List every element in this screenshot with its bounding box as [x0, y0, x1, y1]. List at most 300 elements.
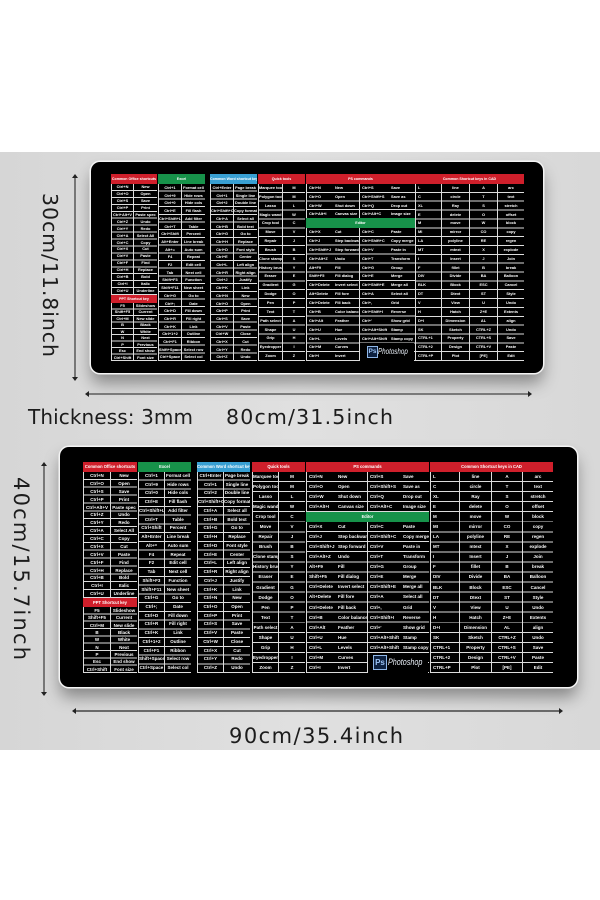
- column: office keys: Ctrl+S: [117, 198, 128, 203]
- column: CAD names 2: Undo: [506, 326, 516, 332]
- column: Excel keys: Ctrl+R: [164, 316, 176, 321]
- column: CAD keys 1: M: [433, 514, 437, 519]
- column: CAD keys 2: O: [505, 504, 509, 509]
- column: CAD names 1: [441, 184, 469, 361]
- column: PPT keys: N: [95, 645, 99, 650]
- column: PPT actions: [133, 303, 157, 361]
- logo: Photoshop large: [368, 653, 428, 673]
- column: Excel actions: Function: [185, 277, 202, 282]
- column: Excel keys: Ctrl+Shift+L: [159, 216, 181, 221]
- column: Word keys: Ctrl+V: [216, 324, 228, 329]
- column: CAD keys 2: A: [505, 474, 509, 479]
- column: CAD keys 1: C: [418, 194, 421, 199]
- label: large mat width: 90cm/35.4inch: [229, 724, 403, 748]
- column: Word actions: Left align: [227, 560, 247, 565]
- column: CAD keys 2: AL: [481, 318, 486, 323]
- column: office actions: Print: [141, 205, 150, 210]
- column: Word actions: Print: [241, 308, 250, 313]
- column: Excel keys: Tab: [167, 270, 173, 275]
- column: tool names: Eyedropper: [253, 655, 278, 660]
- column: CAD keys 1: H: [418, 309, 421, 314]
- column: CAD names 2: Extents: [530, 615, 546, 620]
- column: CAD names 1: Sketch: [468, 635, 483, 640]
- column: CAD keys 1: I: [433, 554, 434, 559]
- column: CAD keys 2: CO: [504, 524, 510, 529]
- column: Word keys: Ctrl+G: [204, 525, 217, 530]
- column: CAD keys 1: [415, 184, 441, 361]
- column: office actions: Underline: [114, 591, 134, 596]
- column: CAD names 2: Balloon: [504, 273, 518, 278]
- column: Word actions: Select all: [237, 216, 254, 221]
- column: CAD names 2: Undo: [532, 635, 544, 640]
- column: editor actions left: Levels: [335, 336, 347, 340]
- column: CAD keys 2: T: [482, 194, 485, 199]
- column: Word keys: Ctrl+S: [216, 316, 228, 321]
- column: Excel keys: Shift+Space: [159, 347, 181, 352]
- column: editor actions left: Fill fore: [338, 594, 354, 599]
- heading: Excel: Excel: [177, 177, 186, 181]
- column: CAD keys 1: XL: [433, 494, 439, 499]
- column: PPT actions: White: [140, 329, 151, 334]
- icon: Ps badge: Ps: [375, 658, 385, 667]
- column: Word actions: Go to: [231, 525, 243, 530]
- column: office actions: Italic: [119, 583, 129, 588]
- column: tool keys: S: [293, 256, 295, 261]
- heading: PPT shortcuts: PPT Shortcut key: [119, 297, 149, 301]
- column: editor actions right: Transform: [391, 256, 410, 261]
- column: Excel keys: F2: [149, 560, 154, 565]
- column: CAD names 2: arc: [535, 474, 541, 479]
- column: CAD names 1: Sketch: [449, 326, 462, 332]
- column: Excel actions: Format cell: [183, 185, 204, 190]
- column: PS actions left: New: [335, 185, 343, 190]
- column: tool names: Pen: [267, 300, 274, 305]
- heading: PPT shortcuts: [83, 598, 137, 607]
- column: editor keys right: Ctrl+Alt+Shift: [370, 635, 399, 640]
- column: Excel actions: Ribbon: [187, 339, 200, 344]
- column: office actions: Redo: [141, 226, 150, 231]
- column: office actions: Replace: [138, 267, 153, 272]
- column: PPT actions: Slideshow: [113, 608, 135, 613]
- column: tool names: Lasso: [265, 203, 276, 208]
- column: editor keys right: Ctrl+Shift+I: [362, 309, 383, 314]
- column: tool keys: E: [293, 273, 295, 278]
- column: Excel actions: Fill flash: [169, 499, 187, 504]
- heading: PS commands: [306, 462, 429, 472]
- column: CAD names 2: Cancel: [531, 585, 545, 590]
- column: Word actions: Print: [232, 613, 242, 618]
- column: Excel keys: [138, 472, 164, 673]
- column: CAD names 1: Dtext: [451, 291, 460, 296]
- column: PPT keys: P: [121, 342, 124, 347]
- column: Word keys: Ctrl+S: [204, 621, 217, 626]
- column: editor keys left: Ctrl+J: [309, 238, 320, 243]
- column: office keys: Ctrl+O: [90, 481, 104, 486]
- column: CAD keys 1: SK: [418, 326, 423, 332]
- column: Excel keys: Tab: [148, 569, 155, 574]
- column: CAD names 1: line: [472, 474, 479, 479]
- column: CAD names 1: View: [470, 605, 481, 610]
- column: PS actions right: Image size: [403, 504, 426, 509]
- label: small mat height: 30cm/11.8inch: [38, 193, 62, 357]
- column: editor keys right: Ctrl+,: [362, 300, 372, 305]
- heading: editor: [306, 218, 415, 228]
- column: Word keys: Ctrl+D: [204, 543, 217, 548]
- column: CAD keys 1: D+I: [418, 318, 424, 323]
- column: office keys: Ctrl+Alt+V: [86, 504, 108, 510]
- column: CAD keys 2: CTRL+Z: [476, 326, 491, 332]
- column: tool keys: J: [293, 238, 295, 243]
- column: tool names: Eraser: [258, 574, 272, 579]
- column: CAD names 2: regen: [506, 238, 516, 243]
- column: editor actions right: Merge all: [391, 282, 408, 287]
- column: Excel keys: Ctrl+0: [164, 200, 176, 205]
- label: thickness: Thickness: 3mm: [27, 405, 193, 429]
- column: Word actions: Undo: [241, 354, 250, 359]
- column: editor actions left: Feather: [335, 318, 349, 323]
- column: CAD keys 1: DT: [433, 595, 439, 600]
- column: editor keys left: Ctrl+L: [309, 336, 320, 340]
- column: Word keys: Ctrl+K: [216, 285, 228, 290]
- column: editor keys right: Ctrl+': [362, 318, 372, 323]
- column: Word actions: Cut: [242, 339, 249, 344]
- column: editor keys left: Ctrl+Delete: [309, 584, 333, 589]
- column: tool keys: Y: [293, 265, 295, 270]
- column: CAD keys 1: MT: [433, 544, 440, 549]
- column: office actions: Paste spec: [112, 504, 136, 510]
- column: CAD names 1: circle: [450, 194, 461, 199]
- column: PPT actions: [110, 607, 137, 673]
- column: CAD keys 2: BA: [481, 273, 486, 278]
- column: office actions: Undo: [141, 219, 150, 224]
- column: CAD names 1: Divide: [450, 273, 461, 278]
- column: Word actions: Center: [239, 254, 252, 259]
- column: office actions: Underline: [137, 288, 154, 293]
- column: editor actions left: Fill fore: [335, 291, 349, 296]
- column: editor keys left: Ctrl+X: [309, 229, 321, 234]
- column: office actions: New: [142, 184, 150, 189]
- column: PPT actions: Black: [118, 630, 130, 635]
- column: CAD names 1: Divide: [469, 574, 482, 579]
- column: Excel keys: Ctrl+0: [145, 490, 158, 495]
- column: tool keys: O: [290, 595, 294, 600]
- column: editor actions left: Fill back: [335, 300, 351, 305]
- column: Excel actions: Date: [189, 301, 198, 306]
- column: CAD names 2: regen: [532, 534, 544, 539]
- column: PS keys left: Ctrl+Alt+I: [309, 504, 329, 509]
- column: office keys: Ctrl+H: [90, 568, 104, 572]
- column: Excel actions: Line break: [167, 534, 189, 539]
- column: CAD keys 2: CTRL+V: [476, 344, 491, 349]
- column: PPT actions: Font size: [137, 354, 154, 360]
- panel: small mouse mat 80x30: [91, 162, 543, 373]
- column: tool names: Magic wand: [259, 212, 282, 217]
- column: Excel actions: Edit cell: [186, 262, 201, 267]
- column: tool names: Polygon tool: [259, 194, 282, 199]
- column: PPT keys: Ctrl+M: [116, 316, 129, 321]
- column: PPT keys: B: [95, 630, 99, 635]
- column: PPT keys: Esc: [119, 348, 126, 353]
- column: PS actions left: Canvas size: [335, 211, 357, 216]
- column: CAD keys 2: B: [482, 265, 485, 270]
- column: CAD keys 2: X: [505, 544, 508, 549]
- column: PPT actions: New slide: [114, 623, 134, 628]
- column: editor actions right: Stamp: [391, 327, 403, 332]
- heading: PPT shortcuts: PPT Shortcut key: [93, 600, 127, 605]
- column: CAD names 2: break: [532, 564, 544, 569]
- column: Word actions: Font style: [236, 247, 255, 252]
- column: Word keys: [210, 184, 233, 361]
- column: CAD names 1: Hatch: [450, 309, 461, 314]
- column: Word actions: Link: [242, 285, 250, 290]
- heading: CAD shortcuts: Common Shortcut keys in CAD: [461, 464, 522, 469]
- heading: editor: [306, 512, 429, 522]
- column: Word keys: Ctrl+X: [204, 648, 217, 653]
- column: CAD keys 1: M: [418, 220, 421, 225]
- column: office actions: Cut: [120, 544, 128, 549]
- column: CAD names 1: Design: [468, 655, 483, 660]
- column: Word actions: Page break: [235, 185, 256, 190]
- column: office actions: Paste: [118, 552, 130, 557]
- column: CAD keys 2: [PE]: [480, 353, 487, 358]
- column: editor keys left: Ctrl+Shift+J: [309, 544, 335, 549]
- column: Word keys: Ctrl+Y: [204, 656, 217, 661]
- column: editor keys right: Ctrl+G: [362, 264, 374, 270]
- column: tool keys: M: [290, 474, 294, 479]
- heading: Excel: [158, 174, 205, 184]
- column: Excel keys: Ctrl+Shift+L: [139, 508, 164, 513]
- column: tool keys: W: [290, 504, 294, 509]
- column: tool names: Gradient: [262, 282, 278, 287]
- column: editor actions right: Merge: [391, 273, 402, 278]
- column: CAD names 1: fillet: [471, 564, 480, 569]
- column: editor keys left: Alt+F9: [309, 564, 323, 569]
- column: editor actions right: [389, 228, 415, 361]
- column: CAD keys 2: W: [482, 220, 485, 225]
- column: CAD keys 1: DIV: [433, 574, 441, 579]
- heading: CAD shortcuts: [430, 462, 553, 472]
- heading: PPT shortcuts: [111, 295, 157, 303]
- column: PPT keys: Ctrl+Shift: [87, 667, 107, 672]
- column: editor actions left: Undo: [335, 256, 345, 261]
- column: CAD keys 2: CO: [481, 229, 486, 234]
- column: editor actions right: Stamp: [403, 635, 417, 640]
- column: PS keys right: Ctrl+S: [362, 185, 374, 190]
- column: Excel keys: Ctrl+T: [164, 224, 176, 229]
- column: Excel keys: F4: [149, 552, 154, 557]
- column: tool names: [258, 184, 282, 361]
- column: Word actions: New: [242, 293, 250, 298]
- column: Word actions: Undo: [231, 665, 243, 670]
- column: editor keys left: Shift+F5: [309, 273, 324, 278]
- table: small mat shortcut sheet: [111, 174, 524, 361]
- column: CAD names 1: circle: [470, 484, 481, 489]
- column: tool keys: J: [291, 534, 293, 539]
- column: CAD keys 1: BLK: [418, 282, 426, 287]
- column: office keys: Ctrl+C: [90, 536, 104, 541]
- column: Word keys: Ctrl+Z: [216, 354, 228, 359]
- column: editor actions left: Invert select: [338, 584, 364, 589]
- column: office actions: Paste: [140, 253, 151, 258]
- column: editor keys left: Ctrl+Delete: [309, 604, 333, 610]
- column: Word actions: Bold text: [237, 224, 254, 229]
- column: tool names: Dodge: [258, 595, 272, 600]
- column: tool names: Path select: [254, 625, 277, 630]
- column: Excel actions: Hide rows: [184, 193, 203, 198]
- column: PPT keys: Shift+F5: [115, 309, 130, 314]
- column: Word actions: Justify: [230, 578, 244, 583]
- column: Excel keys: Alt+Enter: [141, 534, 162, 539]
- column: Excel keys: Ctrl+9: [145, 482, 158, 487]
- column: Excel keys: Ctrl+1: [164, 185, 176, 190]
- column: editor actions left: Invert select: [335, 282, 358, 287]
- column: Word keys: Ctrl+P: [216, 308, 228, 313]
- column: editor keys left: [306, 522, 336, 673]
- column: Excel actions: Line break: [184, 239, 203, 244]
- column: Word keys: Ctrl+Z: [204, 665, 217, 670]
- column: PS actions right: Save as: [403, 484, 420, 489]
- heading: CAD shortcuts: Common Shortcut keys in CAD: [443, 177, 496, 181]
- column: office keys: Ctrl+C: [117, 240, 128, 244]
- column: office actions: Italic: [141, 281, 150, 286]
- column: CAD keys 2: S: [505, 494, 508, 499]
- icon: Ps badge: [367, 346, 378, 358]
- column: tool names: Text: [261, 615, 270, 620]
- column: PS keys left: Ctrl+N: [309, 185, 321, 190]
- column: editor keys right: Ctrl+': [370, 625, 381, 630]
- column: editor keys left: Ctrl+M: [309, 344, 321, 349]
- column: Word keys: Ctrl+B: [204, 517, 217, 522]
- column: Word keys: Ctrl+W: [216, 331, 228, 336]
- column: Word keys: Ctrl+Enter: [213, 185, 231, 190]
- heading: CAD shortcuts: [415, 174, 524, 184]
- heading: quick tools: Quick tools: [272, 177, 291, 181]
- column: editor keys right: Ctrl+C: [362, 229, 374, 234]
- column: PS keys left: [306, 472, 336, 512]
- column: editor keys left: Ctrl+B: [309, 309, 321, 314]
- column: tool keys: P: [293, 300, 295, 305]
- column: Excel actions: Table: [172, 517, 184, 522]
- column: CAD keys 2: BA: [504, 574, 510, 579]
- column: office actions: Open: [141, 191, 150, 196]
- column: office keys: Ctrl+P: [90, 497, 104, 502]
- column: PPT keys: Ctrl+M: [90, 623, 104, 628]
- column: tool names: Path select: [260, 318, 281, 323]
- column: PS keys right: Ctrl+Alt+C: [370, 504, 392, 509]
- column: Word keys: Ctrl+V: [204, 630, 217, 635]
- column: Excel actions: New sheet: [184, 285, 203, 290]
- heading: editor: Editor: [362, 514, 373, 519]
- column: editor actions right: Select all: [403, 594, 423, 599]
- heading: office shortcuts: Common Office shortcuts: [85, 464, 135, 469]
- column: office actions: Undo: [118, 512, 130, 517]
- column: CAD keys 1: LA: [433, 534, 439, 539]
- column: tool names: Eraser: [264, 273, 277, 278]
- column: PS actions right: Drop out: [403, 494, 422, 499]
- column: editor actions right: Copy merge: [403, 534, 429, 539]
- column: office keys: Ctrl+Alt+V: [113, 212, 132, 217]
- column: Excel actions: Fill right: [186, 316, 201, 321]
- column: PPT keys: [83, 607, 110, 673]
- column: tool keys: T: [291, 615, 293, 620]
- column: CAD keys 1: DIV: [418, 273, 424, 278]
- column: Excel keys: F2: [168, 262, 172, 267]
- column: editor actions left: Cut: [338, 524, 346, 529]
- column: tool keys: L: [291, 494, 293, 499]
- column: CAD names 2: [522, 472, 553, 673]
- column: tool keys: C: [290, 514, 294, 519]
- column: CAD names 2: Paste: [532, 655, 544, 660]
- column: editor keys left: Ctrl+U: [309, 327, 321, 332]
- column: CAD names 2: offset: [506, 212, 516, 217]
- column: Excel actions: Format cell: [166, 473, 190, 478]
- column: CAD keys 2: X: [482, 247, 485, 252]
- column: CAD keys 2: O: [482, 212, 485, 217]
- column: CAD keys 2: Z+E: [503, 615, 511, 620]
- column: Excel keys: Ctrl+Space: [140, 665, 163, 670]
- heading: office shortcuts: Common Office shortcuts: [112, 177, 156, 181]
- column: PS keys right: Ctrl+Shift+S: [362, 194, 384, 199]
- column: editor actions right: Copy merge: [391, 238, 414, 243]
- column: CAD keys 1: I: [418, 256, 419, 261]
- column: Excel actions: Fill right: [169, 621, 187, 626]
- column: Word actions: Link: [232, 587, 242, 592]
- column: Word actions: Save: [232, 621, 242, 626]
- column: Excel keys: Ctrl+1+2: [162, 331, 178, 336]
- column: editor actions right: Group: [391, 264, 403, 270]
- column: editor keys right: Ctrl+A: [370, 594, 384, 599]
- column: editor keys left: Ctrl+M: [309, 655, 323, 660]
- column: Word actions: Double line: [225, 490, 249, 495]
- column: CAD names 2: Undo: [532, 605, 544, 610]
- column: editor actions right: Show grid: [391, 318, 410, 323]
- column: PPT actions: Current: [116, 615, 132, 620]
- column: PS keys left: Ctrl+W: [309, 202, 322, 208]
- arrow: large mat height: [41, 462, 47, 696]
- column: Excel actions: Repeat: [170, 552, 186, 557]
- column: CAD keys 1: CTRL+2: [418, 344, 433, 349]
- column: office actions: Copy: [141, 240, 150, 244]
- column: Word keys: Ctrl+R: [216, 270, 228, 275]
- column: Excel keys: Alt+Enter: [161, 239, 179, 244]
- column: tool keys: Y: [290, 564, 294, 569]
- column: Excel actions: Percent: [170, 525, 186, 530]
- column: editor keys right: Ctrl+Shift+E: [370, 584, 396, 589]
- column: CAD names 2: Balloon: [530, 574, 546, 579]
- column: Excel actions: Hide rows: [167, 482, 189, 487]
- column: office actions: Find: [141, 260, 150, 265]
- column: editor actions left: Fill back: [338, 604, 356, 610]
- column: CAD names 1: mtext: [469, 544, 482, 549]
- column: office keys: Ctrl+Z: [90, 512, 104, 517]
- column: CAD names 2: Cancel: [505, 282, 517, 287]
- label: small mat width: 80cm/31.5inch: [226, 405, 393, 429]
- column: tool names: Shape: [259, 635, 272, 640]
- column: PPT actions: Previous: [114, 652, 134, 657]
- column: Word keys: Ctrl+G: [216, 231, 228, 236]
- column: tool names: Dodge: [264, 291, 277, 296]
- column: editor keys right: Ctrl+C: [370, 524, 384, 529]
- column: tool names: Brush: [259, 544, 272, 549]
- column: tool names: Crop tool: [256, 514, 276, 519]
- column: Word keys: Ctrl+Enter: [200, 473, 221, 478]
- column: editor actions left: Undo: [338, 554, 350, 559]
- column: tool names: Gradient: [256, 585, 275, 590]
- column: PPT actions: Black: [140, 322, 151, 327]
- column: editor keys right: Ctrl+T: [370, 554, 383, 559]
- column: Word keys: Ctrl+W: [203, 639, 218, 644]
- column: tool names: Repair: [264, 238, 277, 243]
